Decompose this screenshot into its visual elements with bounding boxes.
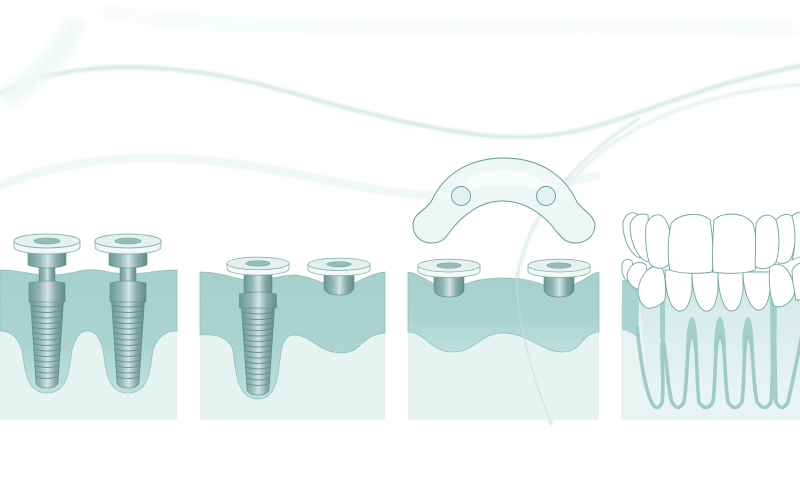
- panel: abutments and bridge: [408, 158, 599, 425]
- lower teeth: [622, 259, 800, 311]
- gum: [200, 272, 385, 399]
- implant 2: [95, 234, 161, 388]
- bone: [621, 300, 800, 420]
- panel: restored teeth: [621, 212, 800, 420]
- panel: implant and healing abutment: [200, 257, 385, 420]
- bone: [408, 325, 599, 420]
- bridge: [413, 158, 595, 243]
- gum: [408, 272, 599, 352]
- root zone: [637, 280, 800, 405]
- implant: [227, 257, 289, 395]
- bone: [0, 320, 177, 420]
- abutment right: [528, 259, 590, 297]
- abutment: [308, 258, 370, 295]
- upper teeth: [623, 212, 800, 273]
- abutment left: [418, 259, 480, 297]
- implant 1: [14, 234, 80, 388]
- panel: two implants: [0, 234, 177, 420]
- gum: [0, 270, 177, 393]
- bone: [200, 325, 385, 420]
- gum papillae: [660, 293, 777, 400]
- root outlines: [637, 300, 800, 408]
- curve over gum: [517, 272, 552, 425]
- gum left: [622, 280, 640, 340]
